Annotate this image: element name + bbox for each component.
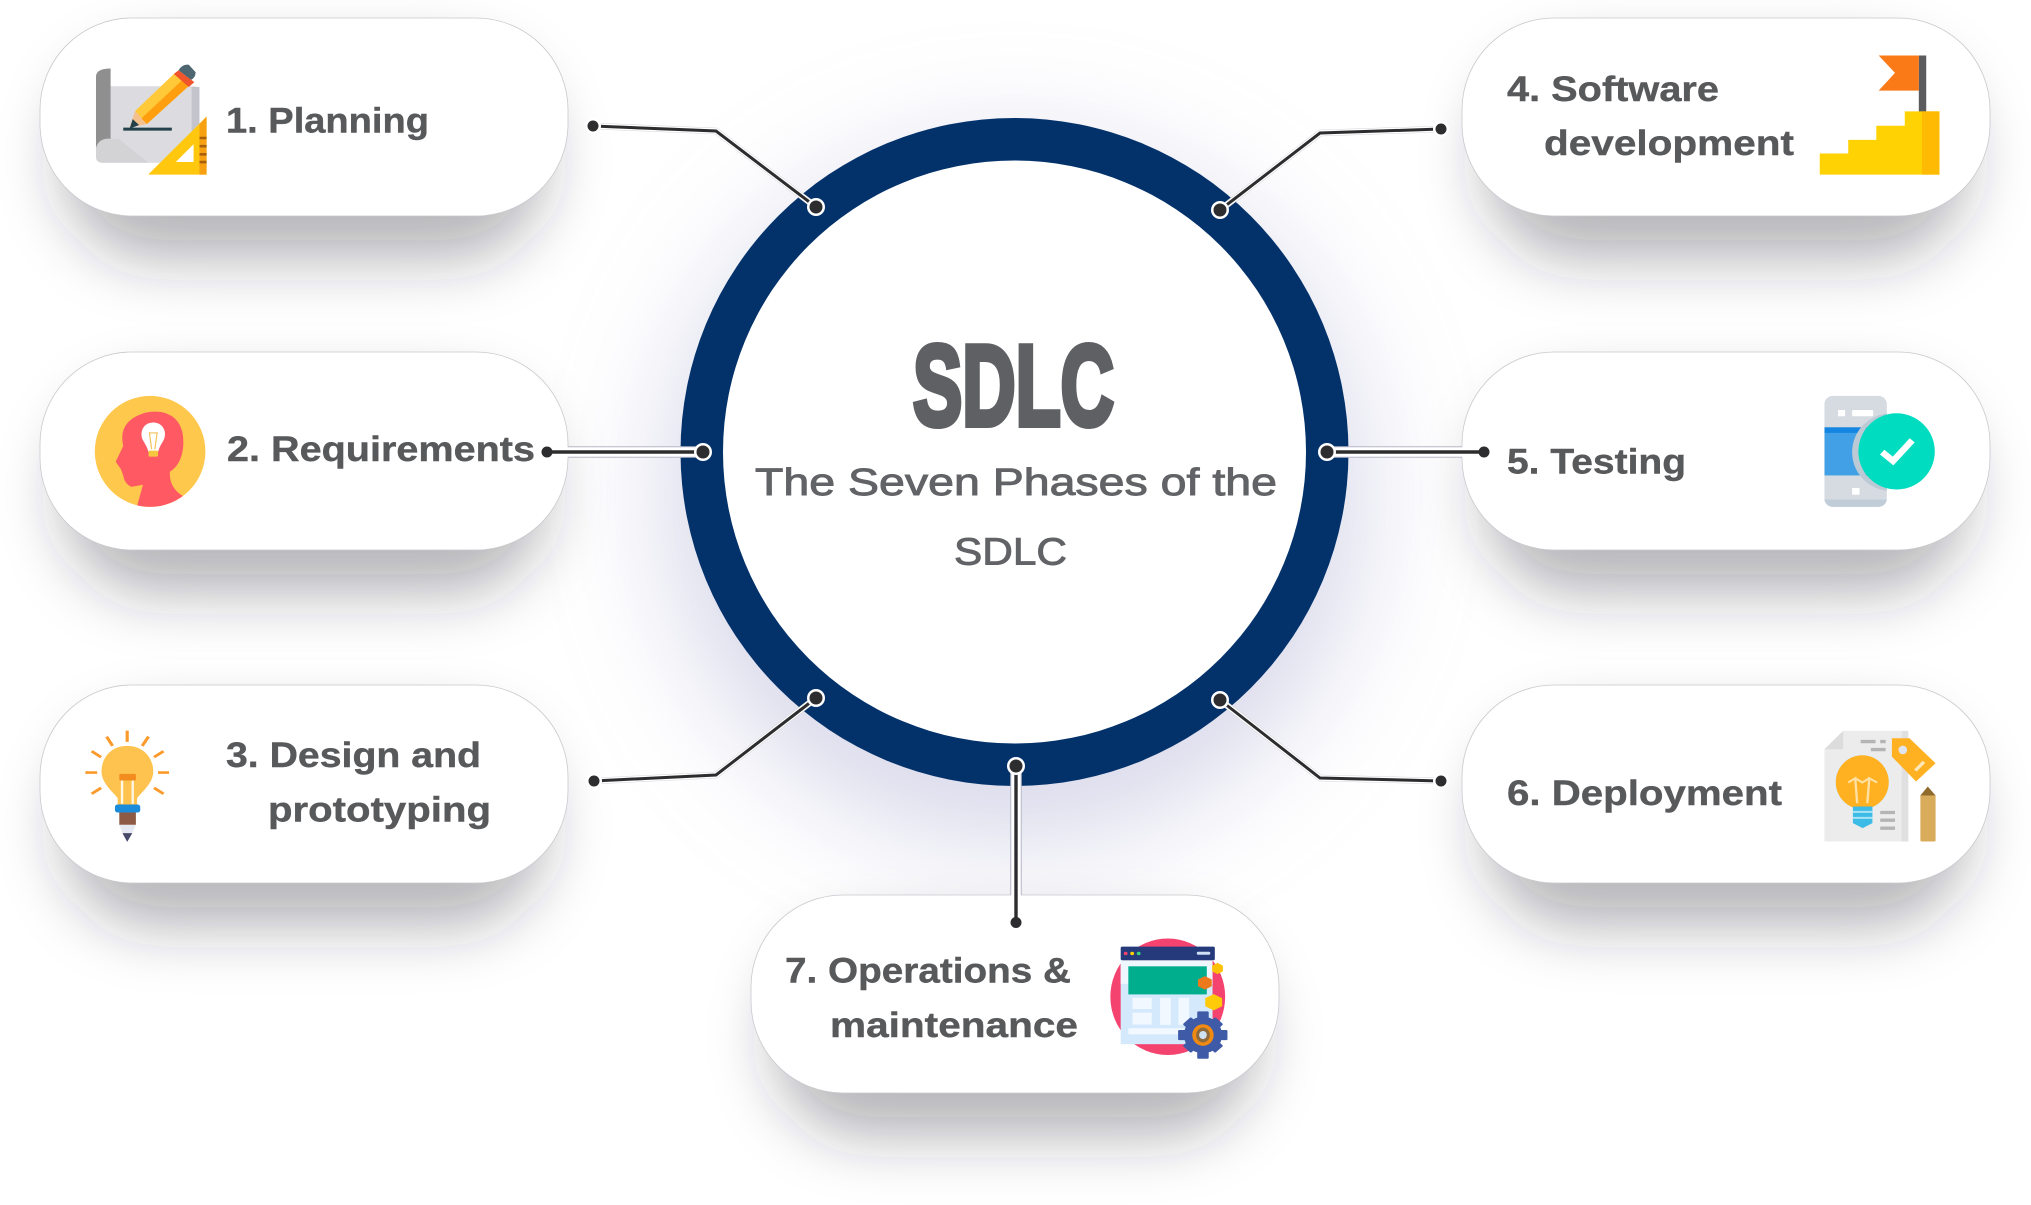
label: 1. Planning: 1. Planning bbox=[226, 102, 429, 140]
label: 7. Operations and maintenance: 7. Operations & bbox=[785, 952, 1071, 990]
connector: deployment to ring bbox=[1211, 691, 1449, 789]
connector: operations to ring bbox=[1007, 757, 1025, 928]
panel: 2. Requirements bbox=[40, 352, 568, 594]
panel: 5. Testing bbox=[1462, 352, 1990, 594]
icon: blueprint, pencil and set square bbox=[96, 65, 207, 175]
subtitle: The Seven Phases of the SDLC bbox=[755, 462, 1277, 574]
panel: 4. Software development: development bbox=[1544, 124, 1794, 163]
subtitle: The Seven Phases of the SDLC: The Seven Phases of the bbox=[755, 462, 1277, 504]
panel: 3. Design and prototyping bbox=[40, 685, 568, 927]
connector: planning to ring bbox=[585, 118, 825, 216]
label: 6. Deployment: 6. Deployment bbox=[1507, 774, 1782, 813]
label: 3. Design and prototyping: 3. Design and bbox=[226, 736, 481, 775]
connector: software development to ring bbox=[1211, 121, 1449, 219]
heading: SDLC: SDLC bbox=[913, 323, 1114, 450]
icon: lightbulb pencil bbox=[85, 731, 169, 842]
label: 4. Software development: 4. Software bbox=[1507, 70, 1719, 109]
panel: 1. Planning bbox=[40, 18, 568, 260]
panel: 4. Software development bbox=[1462, 18, 1990, 260]
panel: 7. Operations and maintenance: maintenance bbox=[830, 1006, 1078, 1045]
subtitle: The Seven Phases of the SDLC: SDLC bbox=[954, 532, 1067, 574]
label: 2. Requirements: 2. Requirements bbox=[227, 430, 535, 469]
connector: requirements to ring bbox=[542, 443, 712, 461]
panel: 6. Deployment bbox=[1462, 685, 1990, 927]
central ring bbox=[680, 118, 1348, 786]
icon: phone with check badge bbox=[1824, 396, 1935, 507]
label: 5. Testing: 5. Testing bbox=[1507, 442, 1686, 482]
connector: testing to ring bbox=[1318, 443, 1490, 461]
icon: head with lightbulb bbox=[95, 396, 205, 509]
icon: document, bulb, tag and pencil bbox=[1824, 731, 1936, 841]
icon: web window with gear bbox=[1110, 939, 1227, 1059]
icon: flag on stairs bbox=[1820, 56, 1939, 175]
circle glow bbox=[664, 145, 1364, 845]
panel: 7. Operations and maintenance bbox=[751, 895, 1279, 1137]
panel: 3. Design and prototyping: prototyping bbox=[268, 790, 491, 830]
connector: design to ring bbox=[586, 689, 825, 789]
